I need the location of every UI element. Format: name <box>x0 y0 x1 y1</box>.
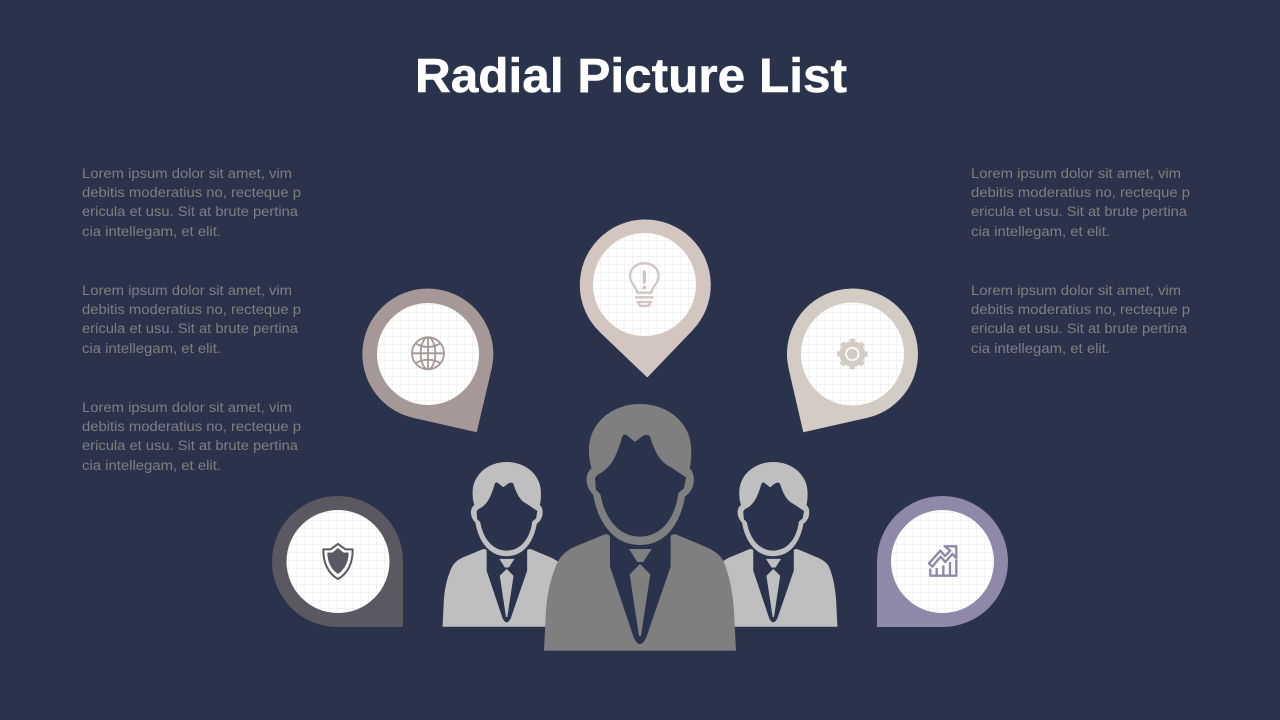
text block: left 2: ericula et usu. Sit at brute pertina <box>82 321 299 336</box>
pin: top with light bulb <box>580 219 711 378</box>
text block: right 2: ericula et usu. Sit at brute pertina <box>971 321 1188 336</box>
text block: right 2 <box>971 283 1190 356</box>
icon: gear <box>839 340 866 368</box>
text block: left 2: Lorem ipsum dolor sit amet, vim <box>82 283 292 298</box>
text block: left 1 <box>82 166 301 239</box>
person: center <box>544 404 736 651</box>
text block: left 3 <box>82 400 301 473</box>
icon: growth chart <box>929 546 956 576</box>
text block: right 1: ericula et usu. Sit at brute pertina <box>971 204 1188 219</box>
text block: left 2: debitis moderatius no, recteque p <box>82 302 301 317</box>
text block: right 1: debitis moderatius no, recteque p <box>971 185 1190 200</box>
text block: right 1: cia intellegam, et elit. <box>971 224 1110 239</box>
text block: right 2: cia intellegam, et elit. <box>971 341 1110 356</box>
text block: left 3: cia intellegam, et elit. <box>82 458 221 473</box>
text block: left 1: debitis moderatius no, recteque p <box>82 185 301 200</box>
text block: left 2 <box>82 283 301 356</box>
person: left <box>443 462 571 627</box>
text block: left 1: ericula et usu. Sit at brute pertina <box>82 204 299 219</box>
pin: upper right with gear <box>787 289 918 432</box>
title: Radial Picture List <box>415 50 847 103</box>
text block: right 2: debitis moderatius no, recteque p <box>971 302 1190 317</box>
text block: left 2: cia intellegam, et elit. <box>82 341 221 356</box>
text block: left 3: debitis moderatius no, recteque p <box>82 419 301 434</box>
icon: light bulb <box>630 263 659 306</box>
text block: right 1: Lorem ipsum dolor sit amet, vim <box>971 166 1181 181</box>
people group <box>443 404 837 651</box>
text block: right 1 <box>971 166 1190 239</box>
pin: upper left with globe <box>362 289 493 432</box>
pin: bottom right with growth chart <box>877 496 1008 627</box>
text block: left 3: ericula et usu. Sit at brute pertina <box>82 438 299 453</box>
icon: shield <box>323 544 353 579</box>
text block: right 2: Lorem ipsum dolor sit amet, vim <box>971 283 1181 298</box>
text block: left 1: Lorem ipsum dolor sit amet, vim <box>82 166 292 181</box>
text block: left 3: Lorem ipsum dolor sit amet, vim <box>82 400 292 415</box>
pin: bottom left with shield <box>272 496 403 627</box>
text block: left 1: cia intellegam, et elit. <box>82 224 221 239</box>
icon: globe <box>412 337 444 369</box>
person: right <box>709 462 837 627</box>
